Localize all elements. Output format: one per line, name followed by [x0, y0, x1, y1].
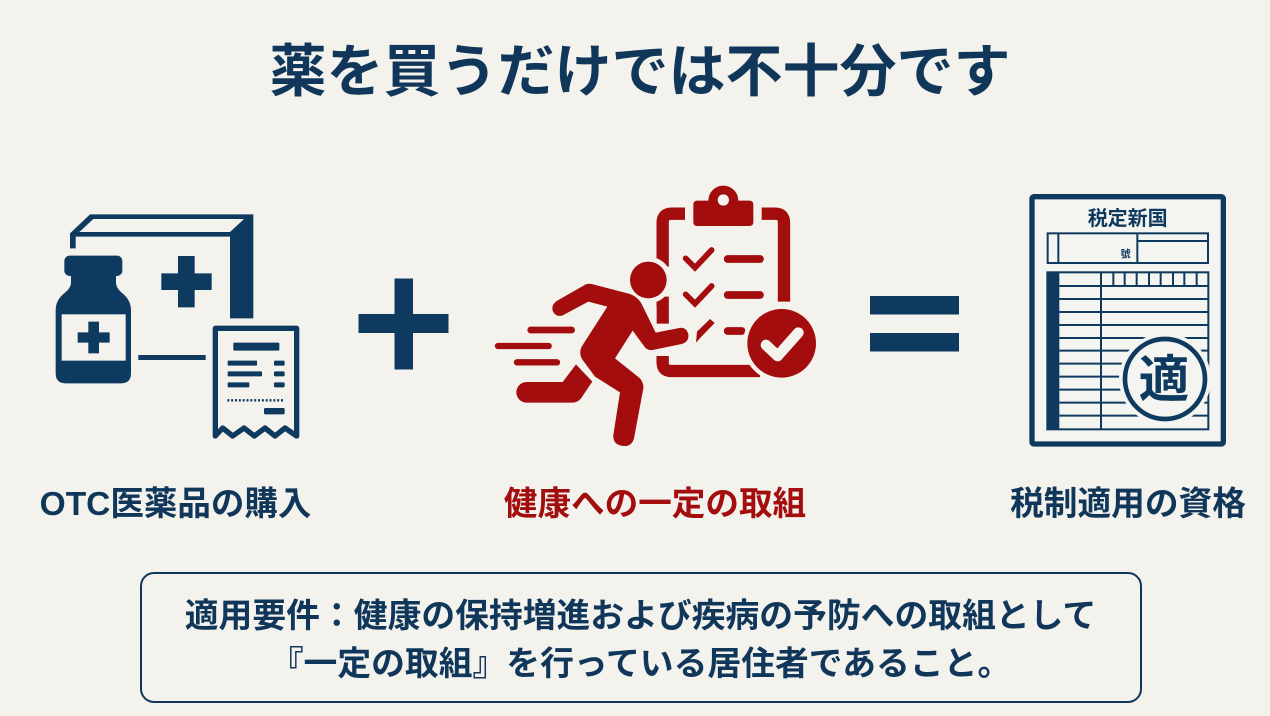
speed lines [498, 330, 572, 362]
form header box [1048, 233, 1208, 263]
form header box: 號 [1121, 248, 1131, 261]
equals sign [870, 296, 959, 352]
icon: tax form with stamp [1032, 197, 1223, 444]
callout line 1: 適用要件：健康の保持増進および疾病の予防への取組として [185, 597, 1096, 635]
plus sign [358, 278, 448, 370]
form sheet [1032, 197, 1223, 444]
icon: medicine box, bottle and receipt [56, 214, 297, 436]
checklist marks [686, 250, 760, 343]
medicine bottle [56, 256, 131, 383]
label: tax eligibility: 税制適用の資格 [1010, 485, 1246, 523]
label: OTC purchase: OTC医薬品の購入 [40, 486, 311, 523]
runner [516, 262, 688, 446]
icon: runner with checklist [498, 186, 820, 446]
connector line [138, 355, 206, 360]
check badge [743, 305, 820, 382]
form heading: 税定新国 [1088, 207, 1168, 230]
callout line 2: 『一定の取組』を行っている居住者であること。 [270, 645, 1011, 683]
stamp: 適 [1139, 351, 1189, 408]
receipt [215, 328, 297, 436]
stamp [1119, 333, 1211, 425]
form table [1047, 272, 1208, 430]
title: 薬を買うだけでは不十分です [270, 40, 1010, 104]
medicine box [70, 214, 253, 318]
clipboard [625, 186, 784, 371]
label: health effort: 健康への一定の取組 [504, 485, 806, 523]
callout: requirement [141, 573, 1141, 702]
